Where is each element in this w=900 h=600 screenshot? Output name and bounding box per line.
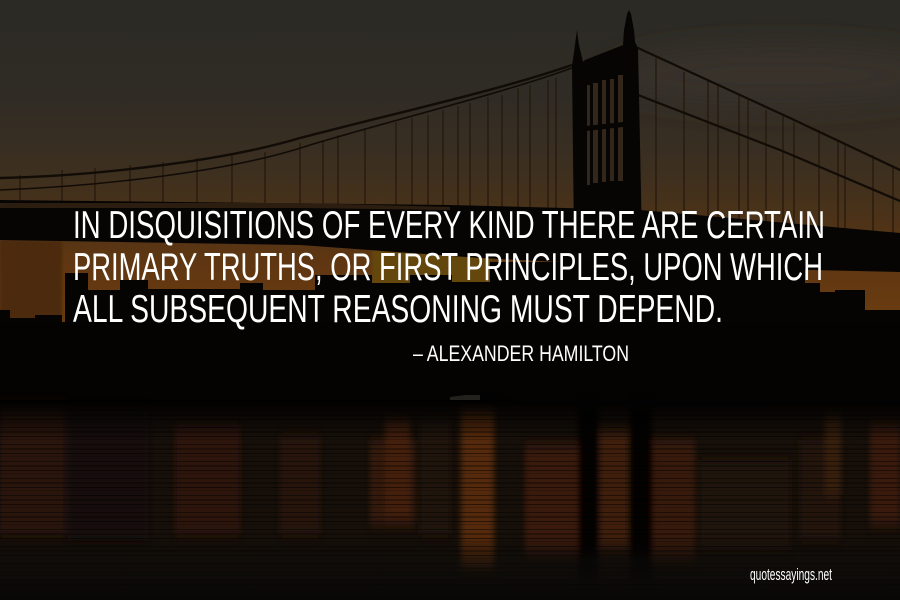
bright horizon glow behind buildings — [0, 240, 492, 320]
deck — [0, 200, 900, 272]
quote text — [73, 204, 825, 331]
watermark: quotessayings.net — [750, 565, 832, 584]
water with reflections — [0, 393, 900, 600]
main cables — [0, 48, 900, 201]
tower — [572, 10, 642, 240]
pier silhouette — [450, 393, 900, 404]
bridge silhouette — [0, 10, 900, 272]
background: dusk sky — [0, 0, 900, 330]
city skyline and shore — [0, 262, 900, 402]
attribution: – ALEXANDER HAMILTON — [413, 341, 629, 366]
suspender cables — [20, 58, 893, 244]
